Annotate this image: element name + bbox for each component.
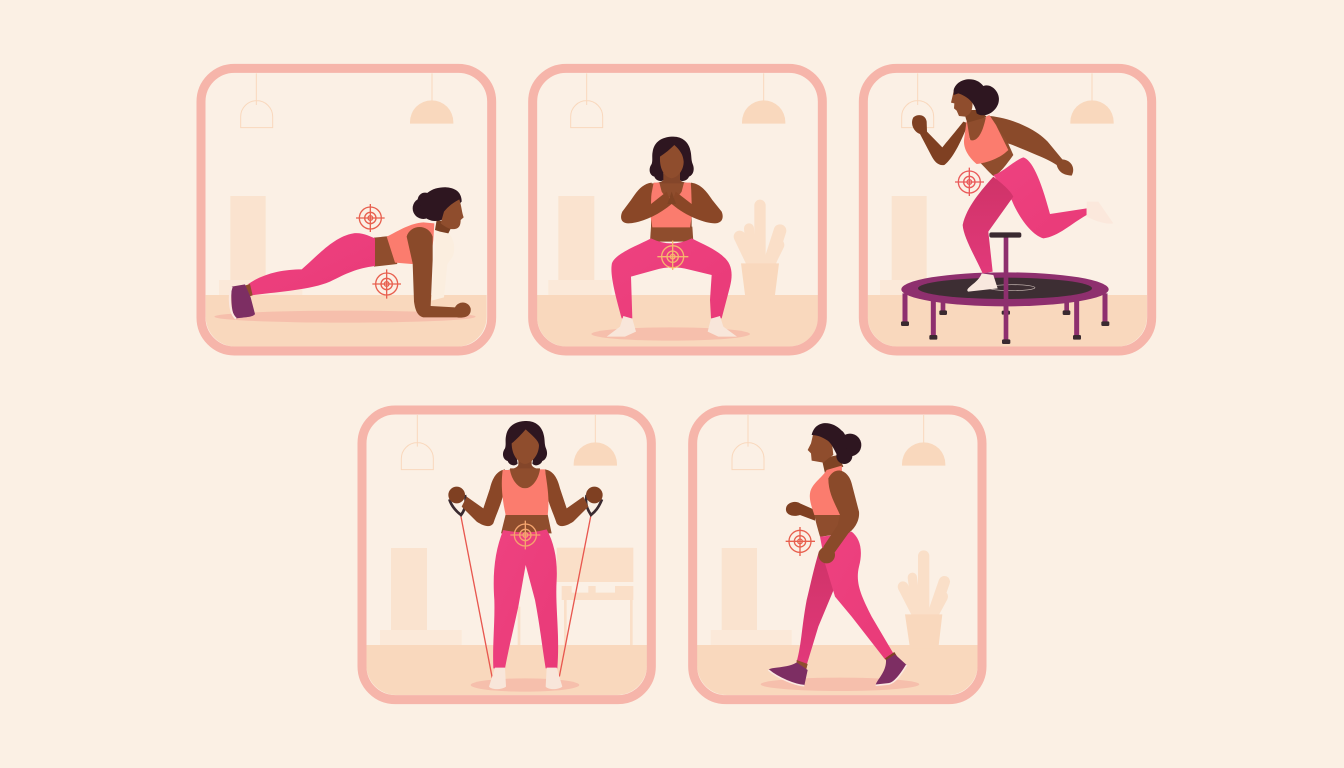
trampoline handle — [989, 232, 1021, 344]
icon: target — [657, 241, 688, 270]
icon: target — [510, 521, 540, 549]
panel: trampoline — [863, 68, 1152, 351]
icon: potted plant — [903, 556, 944, 648]
figure: woman pulling bands — [448, 421, 603, 689]
panel: walking — [693, 410, 982, 700]
icon: target — [955, 168, 984, 196]
icon: target — [786, 527, 815, 556]
figure: woman in forearm plank — [230, 187, 471, 319]
figure: woman walking — [768, 423, 907, 686]
icon: target upper — [356, 204, 385, 232]
figure: woman in wide squat — [607, 137, 737, 337]
resistance bands — [449, 495, 602, 678]
trampoline — [901, 272, 1109, 340]
panel: plank — [201, 68, 492, 351]
icon: potted plant — [740, 205, 780, 300]
panel: sumo squat — [533, 68, 822, 351]
panel: resistance band — [362, 410, 651, 700]
background shelf — [518, 548, 633, 645]
icon: target lower — [372, 269, 401, 299]
figure: woman jumping on trampoline — [912, 79, 1113, 292]
